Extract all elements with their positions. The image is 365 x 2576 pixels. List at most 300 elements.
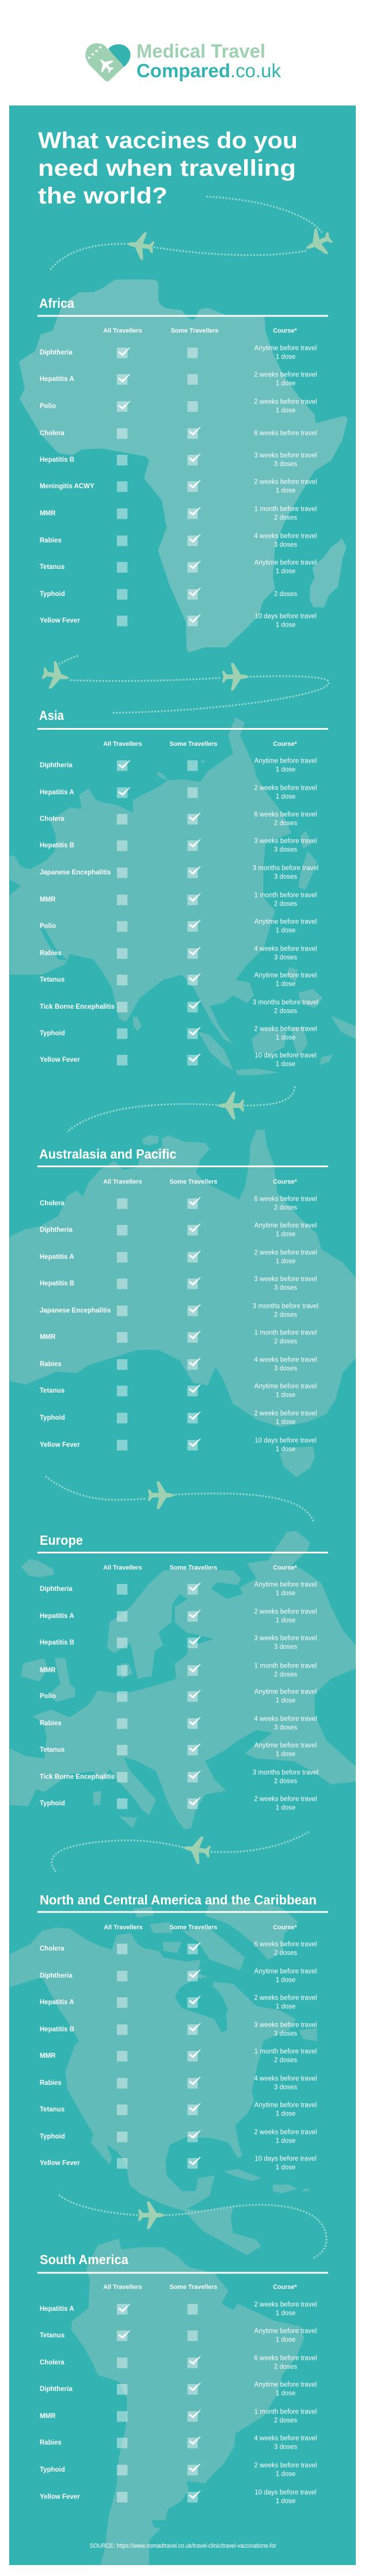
row: Typhoid: 2 weeks before travel (254, 1026, 317, 1033)
row: Hepatitis A (40, 1994, 317, 2011)
column headers (103, 327, 297, 334)
row: Hepatitis B (40, 1276, 317, 1291)
row: Rabies: Rabies (40, 1361, 62, 1368)
row: Yellow Fever: 1 dose (276, 2164, 295, 2171)
row: Diphtheria: 1 dose (276, 1977, 295, 1984)
row: Hepatitis A: 2 weeks before travel (254, 1250, 317, 1257)
row: Rabies: Rabies (40, 950, 62, 957)
row: MMR: 2 doses (274, 1338, 297, 1345)
row: Hepatitis B (40, 452, 317, 468)
row: Rabies: 4 weeks before travel (254, 945, 317, 952)
row: Tetanus (40, 1383, 317, 1398)
row: Yellow Fever: 10 days before travel (254, 2156, 317, 2163)
title: What vaccines do you (38, 128, 298, 153)
row: Polio: Anytime before travel (254, 919, 317, 926)
row: Cholera: 6 weeks before travel (254, 1941, 317, 1948)
panel: Asia (10, 708, 356, 1075)
row: Rabies (40, 1357, 317, 1372)
flight route: Europe to North America (52, 1831, 310, 1872)
row: Hepatitis A: Hepatitis A (40, 1254, 74, 1261)
row: Japanese Encephalitis (40, 1303, 318, 1319)
row: Hepatitis A (40, 2301, 317, 2317)
row: Hepatitis B: Hepatitis B (40, 2026, 74, 2033)
row: Cholera: 6 weeks before travel (254, 2355, 317, 2362)
column headers: Some Travellers (170, 1924, 217, 1931)
column headers: All Travellers (103, 2284, 142, 2291)
row: Tetanus (40, 2102, 317, 2118)
heading: Africa: Africa (39, 296, 74, 311)
islands (133, 760, 356, 1075)
column headers: All Travellers (103, 1564, 142, 1571)
row: Diphtheria (40, 345, 317, 361)
column headers: Course* (273, 741, 297, 748)
row: Meningitis ACWY: 1 dose (276, 488, 295, 495)
logo wordmark line 2: Compared.co.uk (136, 60, 281, 81)
panel: Africa (19, 280, 347, 653)
column headers (103, 1564, 297, 1571)
row: Diphtheria: 1 dose (276, 354, 295, 361)
column headers: All Travellers (103, 327, 142, 334)
row: Cholera (40, 1941, 317, 1956)
row: Tetanus: Anytime before travel (254, 2102, 317, 2109)
row: Hepatitis A (40, 1250, 317, 1265)
row: Tick Borne Encephalitis: 2 doses (274, 1008, 297, 1014)
row: Typhoid: Typhoid (40, 1030, 65, 1037)
column headers: Some Travellers (170, 1564, 217, 1571)
row: Polio: Anytime before travel (254, 1689, 317, 1696)
row: Diphtheria (40, 1222, 317, 1238)
row: MMR: 2 doses (274, 2417, 297, 2424)
row: Hepatitis A (40, 1608, 317, 1624)
row: Hepatitis A: Hepatitis A (40, 1999, 74, 2006)
icon: plane (300, 224, 336, 261)
row: Cholera: 6 weeks before travel (254, 1195, 317, 1202)
row: MMR: 2 doses (274, 514, 297, 521)
row: Hepatitis A: 1 dose (276, 2004, 295, 2011)
row: Typhoid: 2 doses (274, 591, 297, 598)
row: Polio (40, 399, 317, 414)
row: Diphtheria: Diphtheria (40, 2386, 73, 2393)
column headers (103, 1178, 297, 1185)
row: Yellow Fever: 10 days before travel (254, 2489, 317, 2496)
row: Hepatitis B: 3 doses (274, 2030, 297, 2037)
row: Typhoid: Typhoid (40, 2466, 65, 2473)
row: Tetanus: Anytime before travel (254, 1742, 317, 1749)
row: Hepatitis B: 3 doses (274, 1284, 297, 1291)
row: Yellow Fever (40, 2156, 317, 2171)
row: Diphtheria (40, 2382, 317, 2397)
title: need when travelling (38, 156, 296, 181)
row: Tetanus: Anytime before travel (254, 972, 317, 979)
row: Hepatitis A: 1 dose (276, 1617, 295, 1624)
row: Rabies: 3 doses (274, 2084, 297, 2091)
heading: Europe: Europe (40, 1533, 83, 1548)
row: Cholera: Cholera (40, 2359, 64, 2366)
icon: plane (148, 1481, 175, 1509)
heading rule (37, 1911, 328, 1913)
row: Typhoid (40, 2129, 317, 2144)
row: Rabies: 3 doses (274, 1725, 297, 1732)
row: Tetanus: Tetanus (40, 1747, 64, 1753)
column headers: All Travellers (103, 741, 142, 748)
row: Yellow Fever (40, 613, 317, 628)
row: Hepatitis B: 3 weeks before travel (254, 452, 317, 459)
row: Rabies (40, 2435, 317, 2451)
row: Hepatitis B: Hepatitis B (40, 842, 74, 849)
row: Hepatitis B (40, 838, 317, 853)
column headers (103, 741, 297, 748)
column headers: All Travellers (104, 1924, 143, 1931)
row: Yellow Fever: 1 dose (276, 2498, 295, 2505)
row: Yellow Fever: 1 dose (276, 1061, 295, 1068)
panel: South America (37, 2239, 328, 2565)
row: Rabies: 3 doses (274, 1365, 297, 1372)
row: Yellow Fever (40, 1438, 317, 1453)
row: Diphtheria: Diphtheria (40, 1586, 73, 1593)
flight route: Africa to Asia (40, 656, 329, 713)
column headers: Course* (273, 1564, 297, 1571)
row: Hepatitis A (40, 371, 317, 387)
row: Typhoid (40, 588, 297, 599)
row: Cholera: Cholera (40, 816, 64, 823)
row: Tetanus (40, 1742, 317, 1758)
row: Polio: Polio (40, 403, 56, 410)
row: Typhoid: Typhoid (40, 1415, 65, 1421)
row: Hepatitis B: Hepatitis B (40, 1280, 74, 1287)
row: Typhoid: Typhoid (40, 1800, 65, 1807)
row: Cholera: Cholera (40, 430, 64, 437)
row: Diphtheria (40, 1968, 317, 1984)
row: Typhoid: 1 dose (276, 1804, 295, 1811)
map: Europe (10, 1531, 356, 1830)
row: Meningitis ACWY: Meningitis ACWY (40, 483, 94, 490)
row: Polio (40, 1689, 317, 1704)
row: Tick Borne Encephalitis: Tick Borne Encephalitis (40, 1774, 115, 1781)
column headers: Course* (273, 2284, 297, 2291)
row: Japanese Encephalitis: Japanese Encephalitis (40, 869, 111, 876)
row: Hepatitis A: 1 dose (276, 380, 295, 387)
row: Typhoid: 1 dose (276, 1419, 295, 1426)
flight route: Asia to Australasia (67, 1086, 295, 1132)
row: Hepatitis B: Hepatitis B (40, 457, 74, 463)
row: Tick Borne Encephalitis (40, 1000, 318, 1014)
row: Hepatitis B: 3 doses (274, 461, 297, 468)
row: Hepatitis B: Hepatitis B (40, 1639, 74, 1646)
row: Tetanus: Tetanus (40, 564, 64, 571)
row: Typhoid (40, 1026, 317, 1041)
row: Japanese Encephalitis: 3 months before travel (253, 1303, 318, 1310)
row: Diphtheria: Anytime before travel (254, 1582, 317, 1589)
heading rule (37, 2272, 328, 2273)
row: Typhoid: 1 dose (276, 2471, 295, 2477)
row: MMR: 1 month before travel (254, 2049, 317, 2055)
row: Cholera: 2 doses (274, 2363, 297, 2370)
column headers: Course* (273, 327, 297, 334)
row: Cholera (40, 1195, 317, 1212)
column headers: All Travellers (103, 1178, 142, 1185)
row: Diphtheria: 1 dose (276, 2390, 295, 2397)
row: Diphtheria: Anytime before travel (254, 757, 317, 764)
heading: Australasia and Pacific: Australasia and Pacific (39, 1146, 177, 1161)
row: Japanese Encephalitis: 3 doses (274, 874, 297, 881)
row: Polio: 2 weeks before travel (254, 399, 317, 406)
row: Yellow Fever: Yellow Fever (40, 2494, 80, 2500)
row: MMR (40, 2049, 317, 2064)
row: Hepatitis A: Hepatitis A (40, 1613, 74, 1620)
map: North America (10, 1902, 317, 2255)
row: Hepatitis A: 1 dose (276, 2310, 295, 2317)
heading rule (37, 728, 328, 730)
row: Diphtheria (40, 1582, 317, 1597)
row: MMR: MMR (40, 896, 56, 903)
row: Polio: 1 dose (276, 927, 295, 934)
row: Yellow Fever (40, 2489, 317, 2505)
row: MMR: 1 month before travel (254, 892, 317, 899)
row: Yellow Fever: Yellow Fever (40, 617, 80, 624)
row: MMR: 1 month before travel (254, 2408, 317, 2415)
row: Tetanus: 1 dose (276, 2111, 295, 2118)
row: Hepatitis B (40, 2022, 317, 2037)
row: MMR: MMR (40, 2053, 56, 2060)
row: Yellow Fever: 10 days before travel (254, 1053, 317, 1059)
row: MMR: 1 month before travel (254, 1329, 317, 1336)
row: Typhoid (40, 1796, 317, 1811)
row: Japanese Encephalitis (40, 865, 318, 881)
column headers: Some Travellers (170, 1178, 217, 1185)
row: Japanese Encephalitis: 2 doses (274, 1312, 297, 1319)
row: Meningitis ACWY (40, 478, 317, 495)
row: MMR: 2 doses (274, 900, 297, 907)
heading: South America: South America (40, 2252, 128, 2267)
row: Rabies: Rabies (40, 537, 62, 544)
column headers: Some Travellers (170, 741, 217, 748)
row: Rabies (40, 945, 317, 961)
row: Tetanus: Tetanus (40, 976, 64, 983)
logo (85, 40, 281, 81)
row: Cholera: 6 weeks before travel (254, 812, 317, 819)
heading: North and Central America and the Caribbean: North and Central America and the Caribbean (40, 1892, 317, 1907)
row: MMR: MMR (40, 1667, 56, 1674)
map: Asia (10, 718, 356, 1075)
row: Cholera: 2 doses (274, 820, 297, 827)
row: Typhoid: 2 weeks before travel (254, 2462, 317, 2469)
row: MMR (40, 892, 317, 907)
row: Diphtheria: Diphtheria (40, 1972, 73, 1979)
row: Hepatitis B: 3 doses (274, 846, 297, 853)
row: Diphtheria: Diphtheria (40, 762, 73, 769)
icon: plane (217, 1092, 244, 1119)
row: Tetanus: 1 dose (276, 981, 295, 988)
column headers: Course* (273, 1924, 297, 1931)
row: Tetanus: 1 dose (276, 2337, 295, 2344)
row: Rabies: 4 weeks before travel (254, 1357, 317, 1364)
column headers: Course* (273, 1178, 297, 1185)
row: Polio (40, 919, 317, 934)
icon: heart luggage tag (85, 43, 131, 81)
row: Rabies: Rabies (40, 1720, 62, 1727)
row: Hepatitis A: Hepatitis A (40, 376, 74, 383)
panel: Australasia and Pacific (10, 1130, 356, 1477)
row: Japanese Encephalitis: 3 months before travel (253, 865, 318, 872)
row: Yellow Fever: 10 days before travel (254, 1438, 317, 1444)
row: Rabies: 4 weeks before travel (254, 1715, 317, 1722)
row: Rabies (40, 1715, 317, 1732)
row: Typhoid (40, 1410, 317, 1426)
row: Rabies: 3 doses (274, 955, 297, 961)
row: Meningitis ACWY: 2 weeks before travel (254, 478, 317, 485)
map: Australia (10, 1130, 356, 1477)
map: South America (71, 2239, 304, 2565)
row: Hepatitis A: 2 weeks before travel (254, 1608, 317, 1615)
row: Diphtheria (40, 757, 317, 774)
column headers: Some Travellers (170, 2284, 217, 2291)
row: Rabies: 4 weeks before travel (254, 2075, 317, 2082)
row: Tetanus: Anytime before travel (254, 1383, 317, 1390)
row: Cholera: 6 weeks before travel (254, 430, 317, 437)
row: Yellow Fever: 1 dose (276, 1446, 295, 1453)
row: Hepatitis A: 2 weeks before travel (254, 371, 317, 378)
row: Polio: Polio (40, 923, 56, 930)
row: Tick Borne Encephalitis: 2 doses (274, 1778, 297, 1785)
row: MMR: 2 doses (274, 2057, 297, 2064)
row: MMR: 2 doses (274, 1672, 297, 1679)
flight route: intro (50, 197, 336, 270)
row: Hepatitis B (40, 1635, 317, 1651)
row: Rabies (40, 2075, 317, 2091)
panel: Europe (10, 1531, 356, 1830)
row: Tetanus (40, 972, 317, 988)
column headers: Some Travellers (171, 327, 218, 334)
row: Rabies: Rabies (40, 2080, 62, 2087)
row: Cholera (40, 2355, 317, 2370)
row: Diphtheria: Anytime before travel (254, 345, 317, 352)
row: Hepatitis A (40, 785, 317, 800)
row: MMR: MMR (40, 510, 56, 517)
row: Rabies (40, 533, 317, 549)
row: Tetanus (40, 559, 317, 575)
row: Hepatitis A: 1 dose (276, 1258, 295, 1265)
row: Typhoid: 2 weeks before travel (254, 1410, 317, 1417)
row: MMR (40, 1329, 317, 1345)
row: Hepatitis B: 3 weeks before travel (254, 2022, 317, 2029)
row: Yellow Fever: 1 dose (276, 621, 295, 628)
row: Tetanus: 1 dose (276, 568, 295, 575)
row: Tetanus: Anytime before travel (254, 559, 317, 566)
row: Tick Borne Encephalitis: 3 months before travel (253, 1770, 318, 1777)
row: Hepatitis A: Hepatitis A (40, 2306, 74, 2313)
row: Cholera (40, 427, 317, 439)
row: MMR: 1 month before travel (254, 1662, 317, 1669)
row: Tick Borne Encephalitis: 3 months before travel (253, 1000, 318, 1006)
row: MMR: MMR (40, 2413, 56, 2420)
row: Tetanus: 1 dose (276, 1391, 295, 1398)
row: Yellow Fever: Yellow Fever (40, 2160, 80, 2167)
row: Tetanus: Tetanus (40, 2332, 64, 2339)
row: Hepatitis A: 2 weeks before travel (254, 2301, 317, 2308)
flight route: Australasia to Europe (45, 1476, 313, 1522)
row: Tetanus: Tetanus (40, 2106, 64, 2113)
panel: North and Central America and the Caribbean (10, 1892, 328, 2255)
title: the world? (38, 183, 168, 209)
row: Hepatitis B: 3 weeks before travel (254, 1635, 317, 1642)
row: Rabies: 3 doses (274, 542, 297, 549)
row: Tetanus: Anytime before travel (254, 2328, 317, 2334)
row: Hepatitis B: 3 weeks before travel (254, 1276, 317, 1283)
column headers (104, 1924, 297, 1931)
row: MMR (40, 1662, 317, 1679)
row: Typhoid: 1 dose (276, 2137, 295, 2144)
column headers (103, 2284, 297, 2291)
row: Yellow Fever (40, 1053, 317, 1068)
row: Hepatitis A: 2 weeks before travel (254, 1994, 317, 2001)
row: Hepatitis B: 3 weeks before travel (254, 838, 317, 845)
source note: SOURCE: https://www.nomadtravel.co.uk/travel-clinic/travel-vaccinations-for (90, 2543, 276, 2549)
row: Hepatitis A: 2 weeks before travel (254, 785, 317, 792)
row: Yellow Fever: Yellow Fever (40, 1442, 80, 1449)
row: Cholera (40, 812, 317, 827)
logo wordmark line 1: Medical Travel (136, 40, 265, 62)
row: Diphtheria: 1 dose (276, 1231, 295, 1238)
row: Rabies: 4 weeks before travel (254, 533, 317, 540)
icon: plane (181, 1834, 212, 1865)
row: Polio: 1 dose (276, 407, 295, 414)
row: Hepatitis B: 3 doses (274, 1644, 297, 1651)
row: Tetanus (40, 2328, 317, 2344)
flight route: North to South America (59, 2195, 326, 2258)
row: Tick Borne Encephalitis (40, 1770, 318, 1785)
row: Rabies: 3 doses (274, 2444, 297, 2451)
row: Yellow Fever: Yellow Fever (40, 1057, 80, 1063)
row: Tick Borne Encephalitis: Tick Borne Encephalitis (40, 1004, 115, 1010)
row: Hepatitis A: 1 dose (276, 793, 295, 800)
row: MMR (40, 2408, 317, 2424)
heading rule (37, 1166, 328, 1167)
row: Typhoid (40, 2462, 317, 2477)
row: MMR (40, 506, 317, 521)
row: Typhoid: 2 weeks before travel (254, 1796, 317, 1803)
icon: plane (40, 659, 72, 692)
row: Cholera: 2 doses (274, 1205, 297, 1212)
row: Tetanus: 1 dose (276, 1751, 295, 1758)
row: Cholera: Cholera (40, 1945, 64, 1952)
row: Yellow Fever: 10 days before travel (254, 613, 317, 620)
row: Typhoid: Typhoid (40, 591, 65, 598)
title (38, 128, 298, 209)
row: Cholera: 2 doses (274, 1949, 297, 1956)
row: MMR: MMR (40, 1334, 56, 1341)
row: Diphtheria: Anytime before travel (254, 2382, 317, 2389)
row: Diphtheria: Anytime before travel (254, 1222, 317, 1229)
row: Tetanus: Tetanus (40, 1387, 64, 1394)
heading rule (37, 1552, 328, 1553)
row: Diphtheria: 1 dose (276, 1590, 295, 1597)
row: Japanese Encephalitis: Japanese Encephalitis (40, 1307, 111, 1314)
heading rule (37, 315, 328, 317)
row: Cholera: Cholera (40, 1200, 64, 1207)
map: Africa (19, 280, 347, 653)
row: Diphtheria: 1 dose (276, 767, 295, 774)
row: Typhoid: 1 dose (276, 1034, 295, 1041)
row: Polio: 1 dose (276, 1697, 295, 1704)
row: Hepatitis A: Hepatitis A (40, 789, 74, 796)
icon: logo plane (94, 54, 117, 76)
row: Diphtheria: Diphtheria (40, 349, 73, 356)
icon: plane (222, 663, 249, 691)
row: Polio: Polio (40, 1693, 56, 1700)
row: MMR: 1 month before travel (254, 506, 317, 513)
row: Rabies: Rabies (40, 2439, 62, 2446)
icon: plane (125, 230, 155, 261)
